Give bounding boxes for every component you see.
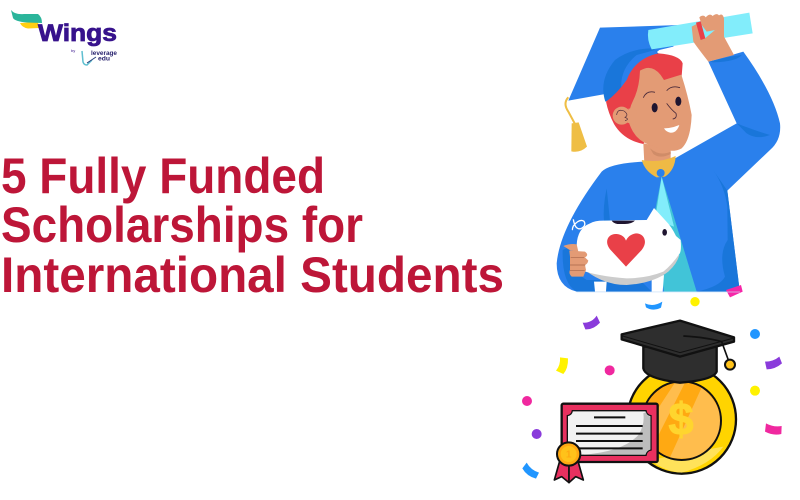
medal ribbon: 1 <box>566 450 572 461</box>
hair <box>606 53 683 144</box>
title line 1: 5 Fully Funded <box>1 148 325 204</box>
eyes <box>652 97 681 112</box>
coin highlight stripes <box>670 387 721 458</box>
face <box>628 68 692 151</box>
icon: wing mark <box>11 10 42 28</box>
wordmark: Wings <box>38 20 117 47</box>
ear detail <box>617 110 627 121</box>
graduation cap <box>622 321 735 383</box>
certificate lines <box>576 417 643 448</box>
leverage edu mark: edu <box>98 56 110 62</box>
cap band <box>603 48 660 102</box>
dollar sign: $ <box>668 393 694 444</box>
leverage edu mark: leverage <box>91 51 118 57</box>
mortarboard <box>568 25 680 101</box>
piggy bank <box>563 208 681 292</box>
pig body <box>577 208 681 278</box>
cap tassel <box>683 336 728 360</box>
confetti <box>522 297 782 479</box>
leverage edu mark <box>82 51 118 65</box>
collar button <box>657 169 665 177</box>
gown shading <box>563 55 770 292</box>
title <box>1 148 504 303</box>
scroll <box>648 13 753 49</box>
pig tail <box>572 219 585 230</box>
medal ribbon <box>554 442 583 483</box>
title line 2: Scholarships for <box>1 197 363 253</box>
coin slot <box>612 221 635 224</box>
logo: Wings by Leverage Edu <box>11 10 118 65</box>
title line 3: International Students <box>1 247 504 303</box>
heart <box>607 233 645 267</box>
pig belly shadow <box>579 250 679 285</box>
tie <box>653 177 697 292</box>
gown hem <box>577 291 740 293</box>
illustration: cap, coin and certificate with confetti <box>522 297 782 483</box>
ear <box>613 107 631 125</box>
certificate <box>562 404 658 462</box>
coin <box>627 365 736 474</box>
smile <box>664 125 679 133</box>
collar <box>642 156 676 177</box>
illustration: graduate holding scroll and piggy bank <box>557 13 780 297</box>
by label: by <box>71 48 75 53</box>
sleeve cuff <box>726 285 743 297</box>
scroll band <box>696 21 705 40</box>
gown body and raised arm <box>557 52 780 292</box>
tassel <box>565 97 587 152</box>
neck <box>643 143 671 163</box>
eyebrows and nose <box>643 87 680 119</box>
pig eye <box>662 229 667 236</box>
raised hand <box>692 14 734 62</box>
pig legs <box>594 275 664 292</box>
holding hand <box>563 244 588 277</box>
